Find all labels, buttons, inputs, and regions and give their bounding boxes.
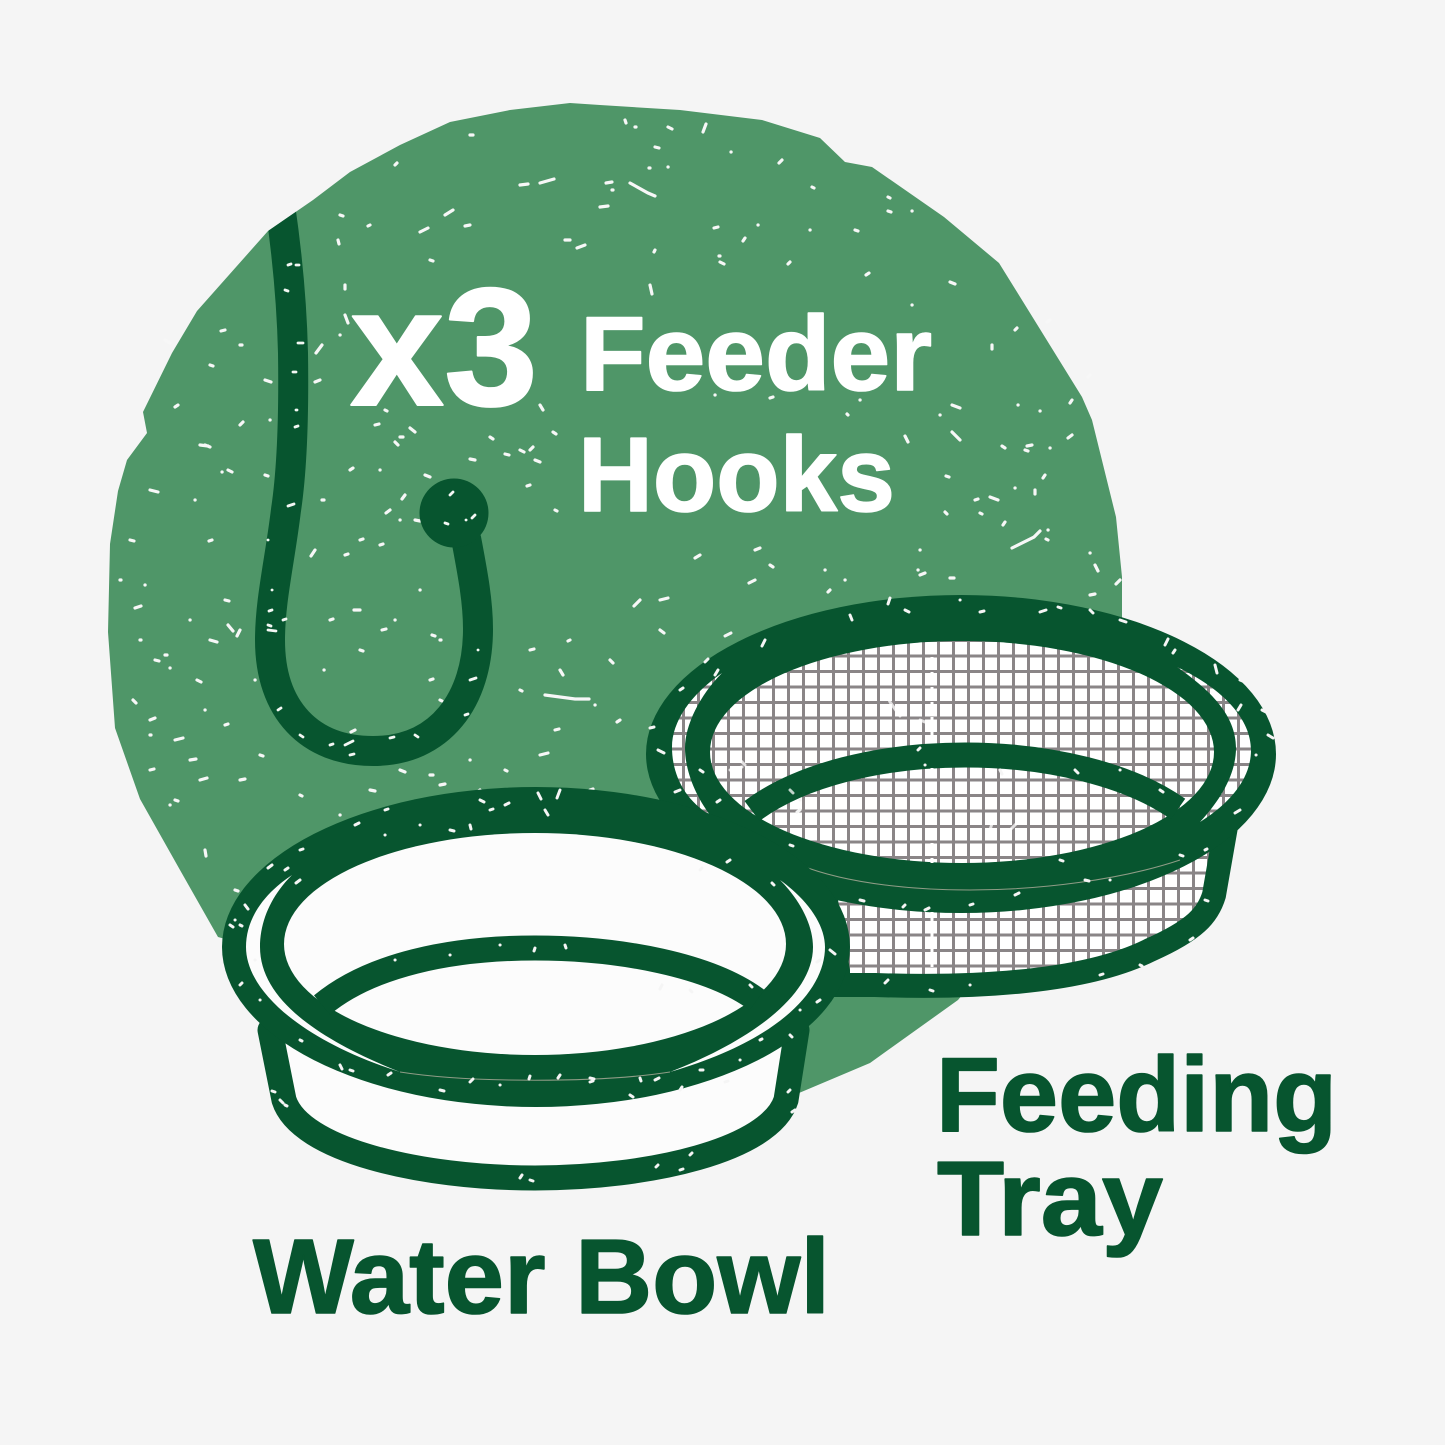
bowl speckles [230, 790, 835, 1181]
tray left crescent gap [672, 673, 722, 815]
label: Feeding Tray: Feeding [936, 1036, 1337, 1154]
bowl opening [284, 833, 786, 1055]
tray base [826, 815, 1228, 986]
bowl left crescent gap [246, 875, 400, 1072]
tray mesh opening [710, 641, 1214, 863]
count label: x3: x3 [350, 253, 538, 441]
tray speckles [650, 598, 1273, 991]
label: Feeding Tray [936, 1036, 1337, 1258]
icon: water bowl [222, 787, 850, 1181]
bowl outer rim [222, 787, 850, 1107]
label: Water Bowl: Water Bowl [253, 1218, 830, 1336]
label: Feeding Tray: Tray [937, 1140, 1163, 1258]
tray right crescent gap [1177, 667, 1251, 822]
label: Feeder Hooks [578, 295, 932, 534]
icon: feeder hook [268, 205, 488, 755]
bowl base [270, 1030, 797, 1178]
icon: feeding tray with mesh [646, 595, 1276, 997]
tray base left join [800, 880, 850, 997]
tray inner back arc [752, 755, 1178, 811]
tray outer rim [646, 595, 1276, 913]
green textured circle [108, 103, 1122, 1093]
tray rim hairline [800, 860, 1180, 890]
tray mesh seam [930, 642, 934, 973]
label: Feeder Hooks: Feeder [580, 295, 932, 413]
speckle texture on green [120, 120, 1120, 891]
mesh scuffs [730, 690, 1016, 830]
bowl right crescent gap [670, 880, 825, 1072]
bowl rim hairline [400, 1072, 670, 1080]
infographic canvas [108, 103, 1331, 1315]
bowl inner back arc [322, 948, 757, 1005]
label: Feeder Hooks: Hooks [578, 416, 895, 534]
